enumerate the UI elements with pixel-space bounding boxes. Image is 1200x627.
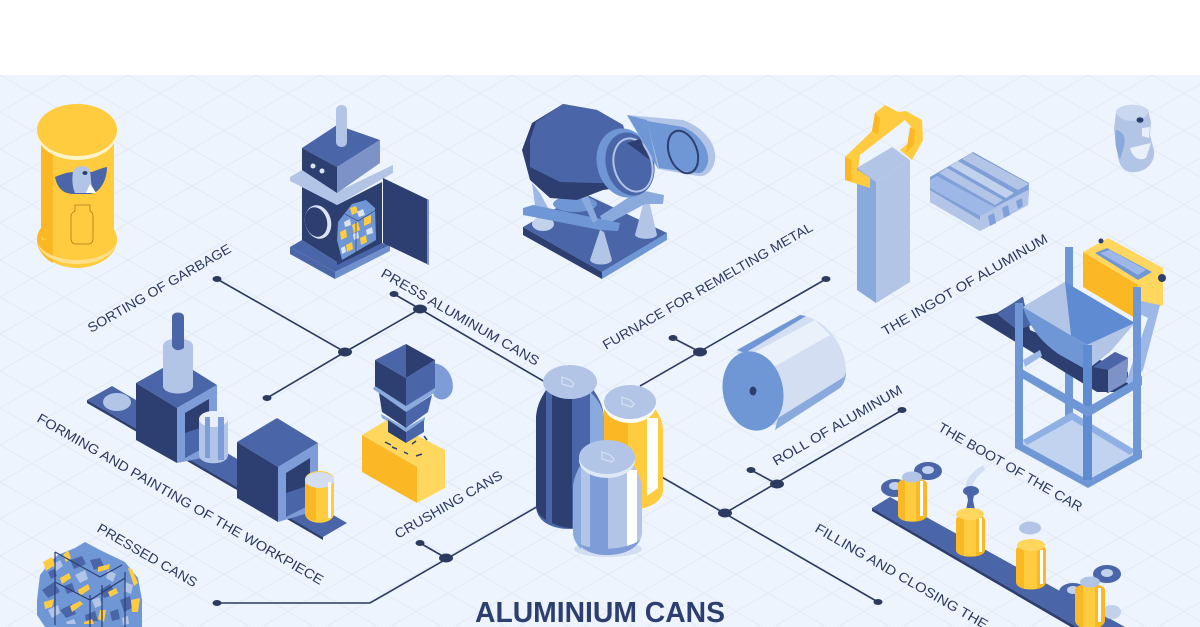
- icon: melting furnace: [522, 104, 715, 279]
- label: the boot of the car: THE BOOT OF THE CAR: [936, 420, 1085, 515]
- label: furnace for remelting metal: FURNACE FOR REMELTING METAL: [600, 219, 816, 353]
- label: pressed cans: PRESSED CANS: [94, 521, 200, 590]
- label: sorting of garbage: SORTING OF GARBAGE: [85, 241, 234, 336]
- icon: yellow sorting bin: [37, 104, 117, 268]
- label: the ingot of aluminum: THE INGOT OF ALUMINUM: [879, 231, 1050, 339]
- icon: press for aluminium cans: [290, 105, 429, 279]
- label: forming and painting of the workpiece: FORMING AND PAINTING OF THE WORKPIECE: [34, 411, 326, 588]
- icon: forming and painting line: [87, 312, 347, 540]
- icon: pressed can bale: [37, 542, 142, 627]
- label: roll of aluminum: ROLL OF ALUMINUM: [770, 382, 905, 469]
- label: filling and closing: FILLING AND CLOSING THE: [812, 521, 991, 627]
- label: press aluminum cans: PRESS ALUMINUM CANS: [378, 266, 542, 369]
- icon: crushed can: [1114, 105, 1154, 172]
- connector lines: [212, 276, 906, 606]
- icon: aluminium ingot and gripper: [845, 105, 923, 303]
- icon: conveyor hopper frame: [975, 238, 1166, 488]
- icon: silver can: [573, 440, 642, 557]
- icon: dark blue can: [536, 365, 604, 529]
- icon: yellow can: [604, 385, 663, 510]
- icon: stack of ingots: [930, 152, 1029, 231]
- icon: filling and closing line: [872, 462, 1125, 627]
- label: crushing cans: CRUSHING CANS: [392, 468, 505, 542]
- icon: roll of aluminium: [715, 315, 846, 436]
- icon: can crusher: [362, 344, 453, 503]
